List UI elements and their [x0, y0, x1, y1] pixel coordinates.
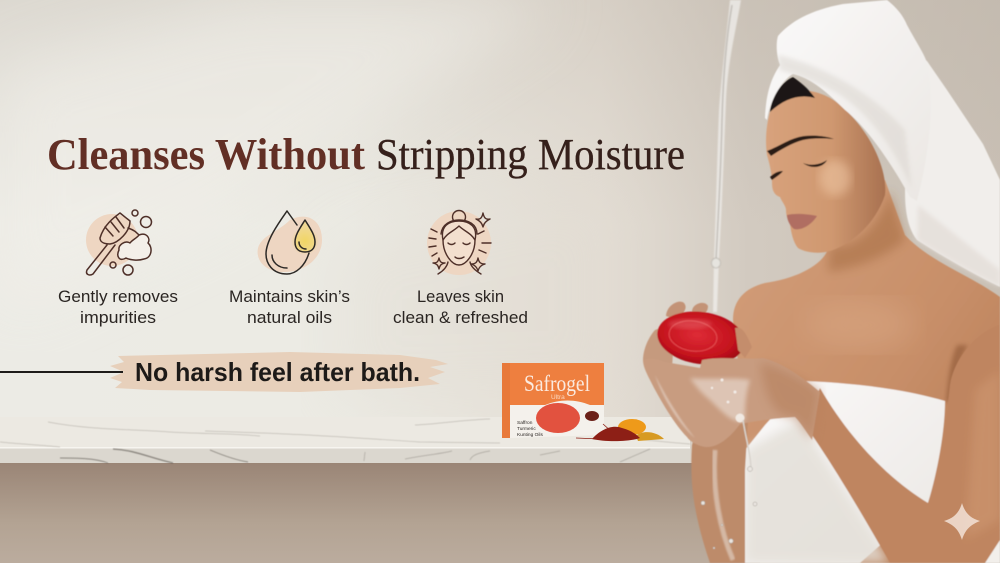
brand name: Safrogel — [524, 371, 590, 396]
neck shading — [828, 190, 905, 272]
cheek glow — [819, 160, 851, 196]
thumb behind soap — [735, 328, 752, 358]
icon: refreshed face — [427, 210, 491, 275]
title — [47, 130, 685, 179]
hair — [770, 77, 815, 112]
towel fold shading — [778, 55, 912, 190]
icon: brush and foam — [86, 210, 152, 275]
soap bar — [654, 306, 748, 370]
product: soap box — [502, 363, 604, 438]
saffron and turmeric pile — [576, 419, 664, 441]
box ingredients: Saffron — [517, 420, 533, 426]
saffron dish icon — [585, 411, 599, 421]
woman — [643, 0, 1000, 563]
eyes — [770, 160, 827, 180]
body towel — [745, 381, 945, 563]
box ingredients: Kunting Oils — [517, 432, 543, 438]
box ingredients: Turmeric — [517, 426, 536, 432]
caption: leaves skin clean and refreshed: clean & refreshed — [393, 308, 528, 327]
caption: leaves skin clean and refreshed — [393, 287, 528, 327]
water drip and droplets — [701, 420, 757, 549]
callout text: No harsh feel after bath. — [135, 357, 420, 387]
armpit crease shadow — [946, 345, 968, 402]
caption: gently removes impurities: Gently removes — [58, 287, 178, 306]
far forearm — [805, 325, 1000, 563]
box ingredients — [517, 420, 543, 438]
caption: leaves skin clean and refreshed: Leaves skin — [417, 287, 504, 306]
marble shelf — [0, 417, 690, 463]
lower arm — [691, 420, 748, 563]
head towel — [765, 0, 931, 201]
towel corner by the elbow — [975, 540, 1000, 563]
feature: gently removes impurities — [58, 210, 178, 327]
box front — [510, 363, 604, 405]
title: Cleanses Without — [47, 130, 365, 179]
back hand — [643, 322, 675, 368]
icon: oil drops — [258, 211, 322, 274]
caption: gently removes impurities: impurities — [80, 308, 156, 327]
leader line — [0, 371, 123, 373]
water stream — [712, 0, 741, 312]
foam trail on arm — [714, 450, 733, 560]
soap bar on box — [536, 403, 580, 433]
foam on hands — [655, 375, 750, 438]
caption: maintains natural oils — [229, 287, 350, 327]
face — [766, 91, 885, 253]
eyebrow — [767, 136, 834, 156]
tail shading — [917, 205, 1000, 287]
title: Stripping Moisture — [376, 130, 685, 179]
sparkle watermark — [944, 503, 980, 540]
wrist shading — [760, 362, 820, 440]
towel tail — [900, 40, 1000, 287]
box side — [502, 363, 510, 438]
lips — [787, 214, 817, 229]
feature: maintains natural oils — [229, 211, 350, 327]
towel shadow — [745, 420, 890, 563]
brand sub name: Ultra — [551, 394, 565, 401]
under-shelf wall — [0, 463, 760, 563]
brush stroke highlight — [110, 352, 448, 392]
cupped hands — [643, 358, 820, 447]
feature: leaves skin clean and refreshed — [393, 210, 528, 327]
back fingers — [666, 302, 708, 320]
arm highlight — [965, 370, 1000, 540]
body and shoulders — [733, 180, 1000, 563]
towel piece behind neck — [823, 225, 860, 288]
caption: maintains natural oils: Maintains skin’s — [229, 287, 350, 306]
callout: no harsh feel after bath — [0, 352, 448, 392]
caption: maintains natural oils: natural oils — [247, 308, 332, 327]
chest highlight — [805, 300, 915, 350]
caption: gently removes impurities — [58, 287, 178, 327]
